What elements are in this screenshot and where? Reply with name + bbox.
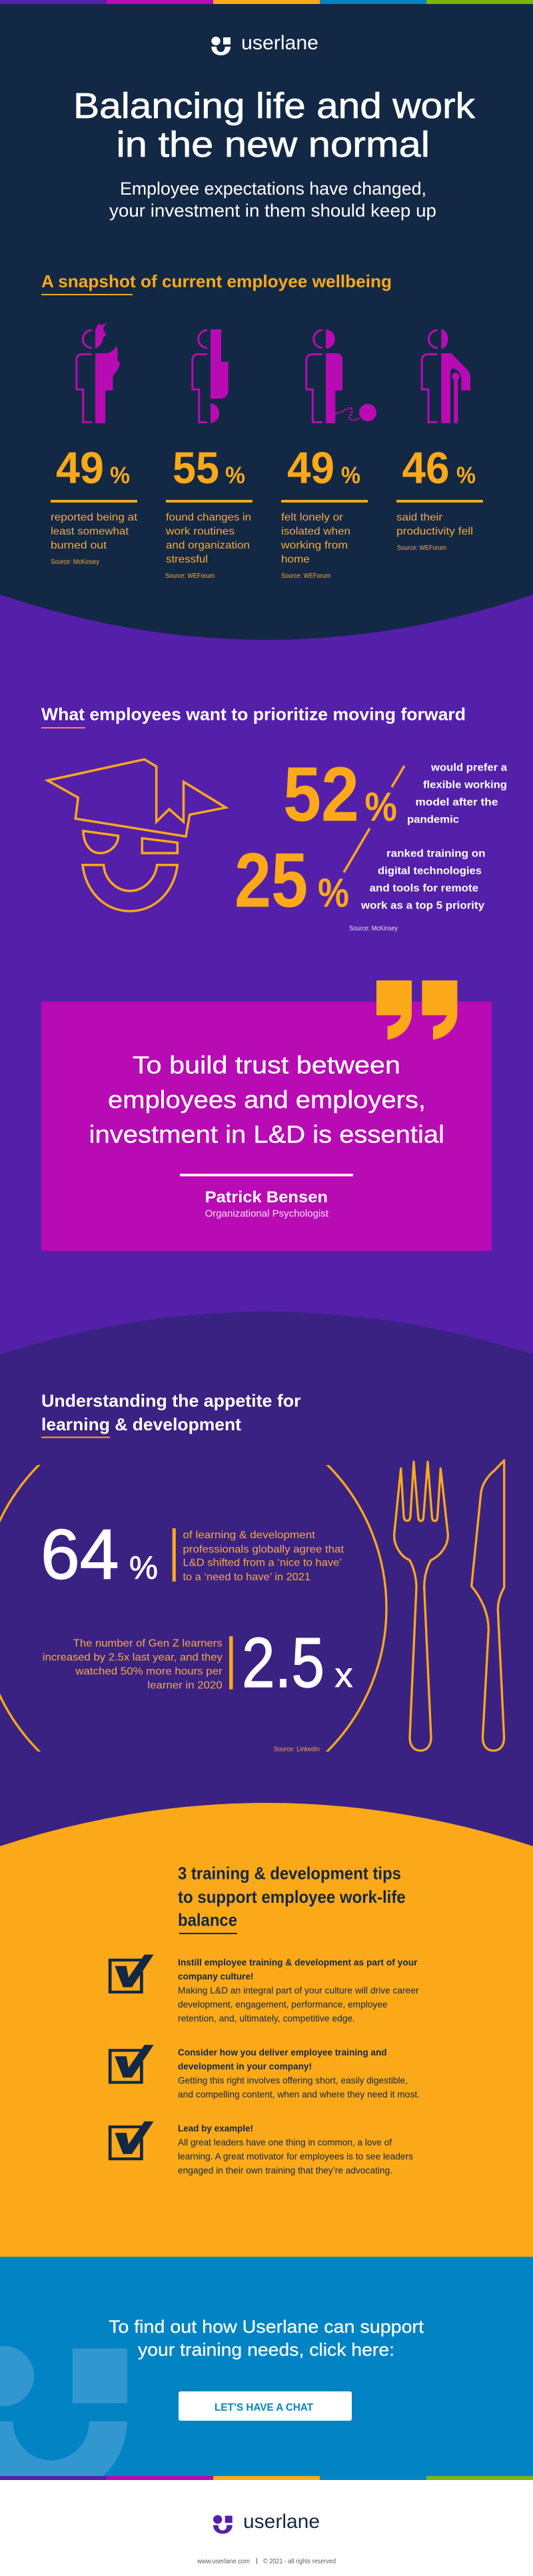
heading: 3 tips: balance — [178, 1910, 237, 1930]
call to action text — [109, 2317, 424, 2359]
stat: 64% L&D shift: of learning & development — [183, 1530, 316, 1541]
stat: 25% digital training — [235, 828, 486, 932]
tip 1: development, engagement, performance, employee — [178, 1999, 388, 2009]
logo: userlane white — [211, 32, 318, 55]
heading: 3 tips: 3 training & development tips — [178, 1864, 401, 1884]
icon: graduation cap face — [47, 759, 226, 911]
quote attribution: Organizational Psychologist — [205, 1209, 328, 1220]
tip 1: retention, and, ultimately, competitive edge. — [178, 2013, 355, 2023]
stat: 52% flexible working: model after the — [416, 797, 498, 808]
quote attribution: Patrick Bensen — [205, 1188, 328, 1206]
stat: 25% digital training: digital technologies — [378, 866, 482, 877]
stat: 55% stressful: 55 — [173, 443, 219, 493]
stat: 25% digital training: ranked training on — [386, 848, 486, 860]
icon: checkbox 1 — [109, 1955, 154, 1993]
stat: 52% flexible working: % — [365, 784, 397, 830]
button: let's have a chat: LET’S HAVE A CHAT — [215, 2402, 313, 2413]
call to action text: your training needs, click here: — [138, 2339, 394, 2359]
stat: 2.5x Gen Z learners: x — [334, 1656, 353, 1695]
subtitle: Employee expectations have changed, — [120, 179, 426, 199]
stat: 2.5x Gen Z learners: Source: LinkedIn — [274, 1746, 320, 1753]
stat: 49% lonely: Source: WEForum — [281, 573, 330, 580]
stat: 49% lonely: felt lonely or — [281, 512, 344, 523]
stat: 49% burned out: least somewhat — [51, 526, 129, 537]
tip 1: company culture! — [178, 1971, 254, 1981]
quote text: employees and employers, — [108, 1086, 426, 1114]
stat: 52% flexible working: flexible working — [423, 780, 507, 791]
tip 2: Getting this right involves offering short, easily digestible, — [178, 2075, 408, 2085]
tip 1 — [178, 1957, 419, 2023]
heading: appetite for L&D — [41, 1391, 301, 1438]
icon: checkbox 3 — [109, 2121, 154, 2160]
logo: userlane white: userlane — [241, 32, 318, 54]
quote text: investment in L&D is essential — [89, 1121, 444, 1148]
heading: 3 tips — [178, 1864, 406, 1934]
stat: 55% stressful: and organization — [166, 540, 250, 551]
tip 2 — [178, 2047, 420, 2099]
stat: 49% burned out: reported being at — [51, 512, 138, 523]
stat: 46% productivity — [396, 443, 483, 552]
tip 3: Lead by example! — [178, 2123, 253, 2133]
button: let's have a chat — [179, 2391, 352, 2421]
stat: 46% productivity: productivity fell — [396, 526, 473, 537]
stat: 49% lonely: isolated when — [281, 526, 350, 537]
panel: quote — [41, 980, 492, 1251]
stat: 55% stressful: work routines — [165, 526, 235, 537]
tip 3 — [178, 2123, 413, 2175]
stat: 64% L&D shift: % — [129, 1551, 158, 1586]
stat: 49% lonely — [280, 443, 368, 580]
stat: 49% burned out: % — [110, 463, 130, 489]
stat: 64% L&D shift: professionals globally agree that — [183, 1544, 344, 1556]
stat: 2.5x Gen Z learners: 2.5 — [242, 1624, 324, 1702]
stat: 49% burned out: 49 — [56, 443, 104, 493]
footer text — [197, 2558, 336, 2565]
top colour bar — [0, 0, 533, 4]
title: in the new normal — [116, 125, 430, 165]
stat: 55% stressful: Source: WEForum — [165, 573, 215, 580]
tip 3: learning. A great motivator for employees is to see leaders — [178, 2151, 413, 2161]
stat: 2.5x Gen Z learners: learner in 2020 — [147, 1680, 223, 1691]
stat: 2.5x Gen Z learners: The number of Gen Z learners — [73, 1638, 223, 1649]
logo: userlane footer: userlane — [243, 2511, 320, 2533]
stat: 25% digital training: and tools for remote — [370, 883, 478, 894]
tip 1: Making L&D an integral part of your culture will drive career — [178, 1985, 419, 1995]
icon: plate — [0, 1465, 388, 1752]
heading: what employees want: What employees want to prioritize moving forward — [41, 704, 466, 724]
icon: stressed person — [193, 329, 229, 423]
stat: 25% digital training: 25 — [235, 837, 308, 924]
stat: 49% burned out: Source: McKinsey — [51, 559, 99, 566]
icon: smile logo purple — [213, 2515, 233, 2534]
stat: 49% burned out — [51, 443, 138, 566]
heading: snapshot: A snapshot of current employee wellbeing — [41, 271, 392, 291]
stat: 46% productivity: 46 — [402, 443, 449, 493]
tip 3: engaged in their own training that they’re advocating. — [178, 2165, 392, 2175]
icon: knife — [472, 1460, 504, 1751]
tip 2: Consider how you deliver employee training and — [178, 2047, 387, 2057]
stat: 55% stressful — [165, 443, 253, 580]
stat: 49% burned out: burned out — [51, 540, 107, 551]
icon: quotation marks — [376, 980, 457, 1040]
tip 1: Instill employee training & development as part of your — [178, 1957, 418, 1967]
heading: 3 tips: to support employee work-life — [178, 1887, 406, 1907]
stat: 64% L&D shift: 64 — [41, 1516, 119, 1594]
stat: 46% productivity: % — [456, 463, 476, 489]
quote text — [89, 1052, 444, 1148]
logo: userlane footer — [213, 2511, 320, 2534]
stat: 64% L&D shift — [41, 1516, 344, 1594]
icon: smile logo — [211, 37, 231, 55]
quote attribution — [205, 1188, 328, 1220]
stat: 25% digital training: % — [318, 870, 349, 916]
stat: 46% productivity: said their — [396, 512, 443, 523]
tip 2: and compelling content, when and where they need it most. — [178, 2089, 420, 2099]
title: Balancing life and work — [73, 86, 476, 126]
stat: 49% lonely: 49 — [287, 443, 334, 493]
icon: burned-out person — [77, 322, 120, 423]
stat: 52% flexible working: would prefer a — [430, 762, 507, 774]
stat: 55% stressful: found changes in — [166, 512, 251, 523]
icon: lonely person with ball and chain — [306, 329, 376, 423]
heading: appetite for L&D: learning & development — [41, 1414, 241, 1434]
icon: unproductive person with cane — [422, 329, 470, 423]
subtitle: your investment in them should keep up — [109, 201, 436, 221]
quote text: To build trust between — [133, 1052, 400, 1079]
tip 2: development in your company! — [178, 2061, 312, 2071]
stat: 2.5x Gen Z learners: increased by 2.5x last year, and they — [43, 1652, 223, 1663]
stat: 52% flexible working: pandemic — [407, 814, 459, 826]
stat: 46% productivity: Source: WEForum — [397, 545, 446, 552]
stat: 52% flexible working: 52 — [283, 751, 359, 838]
stat: 55% stressful: % — [225, 463, 245, 489]
tip 3: All great leaders have one thing in common, a love of — [178, 2137, 392, 2147]
icon: checkbox 2 — [109, 2045, 154, 2083]
stat: 64% L&D shift: to a ‘need to have’ in 2021 — [183, 1572, 310, 1583]
icon: watermark logo — [0, 2346, 127, 2476]
icon: fork — [394, 1462, 448, 1751]
stat: 52% flexible working — [283, 751, 507, 838]
stat: 25% digital training: work as a top 5 priority — [360, 900, 484, 912]
footer text: © 2021 - all rights reserved — [263, 2558, 336, 2565]
stat: 49% lonely: % — [341, 463, 360, 489]
stat: 2.5x Gen Z learners: watched 50% more hours per — [75, 1666, 223, 1678]
heading: appetite for L&D: Understanding the appetite for — [41, 1391, 301, 1411]
stat: 2.5x Gen Z learners — [43, 1624, 353, 1753]
subtitle — [109, 179, 436, 221]
footer text: www.userlane.com — [197, 2558, 250, 2565]
bottom colour bar — [0, 2476, 533, 2480]
stat: 55% stressful: stressful — [166, 554, 208, 565]
call to action text: To find out how Userlane can support — [109, 2317, 424, 2337]
stat: 25% digital training: Source: McKinsey — [349, 925, 398, 932]
stat: 49% lonely: home — [281, 554, 310, 565]
stat: 64% L&D shift: L&D shifted from a ‘nice to have’ — [183, 1557, 342, 1569]
title — [73, 86, 476, 165]
stat: 49% lonely: working from — [280, 540, 348, 551]
